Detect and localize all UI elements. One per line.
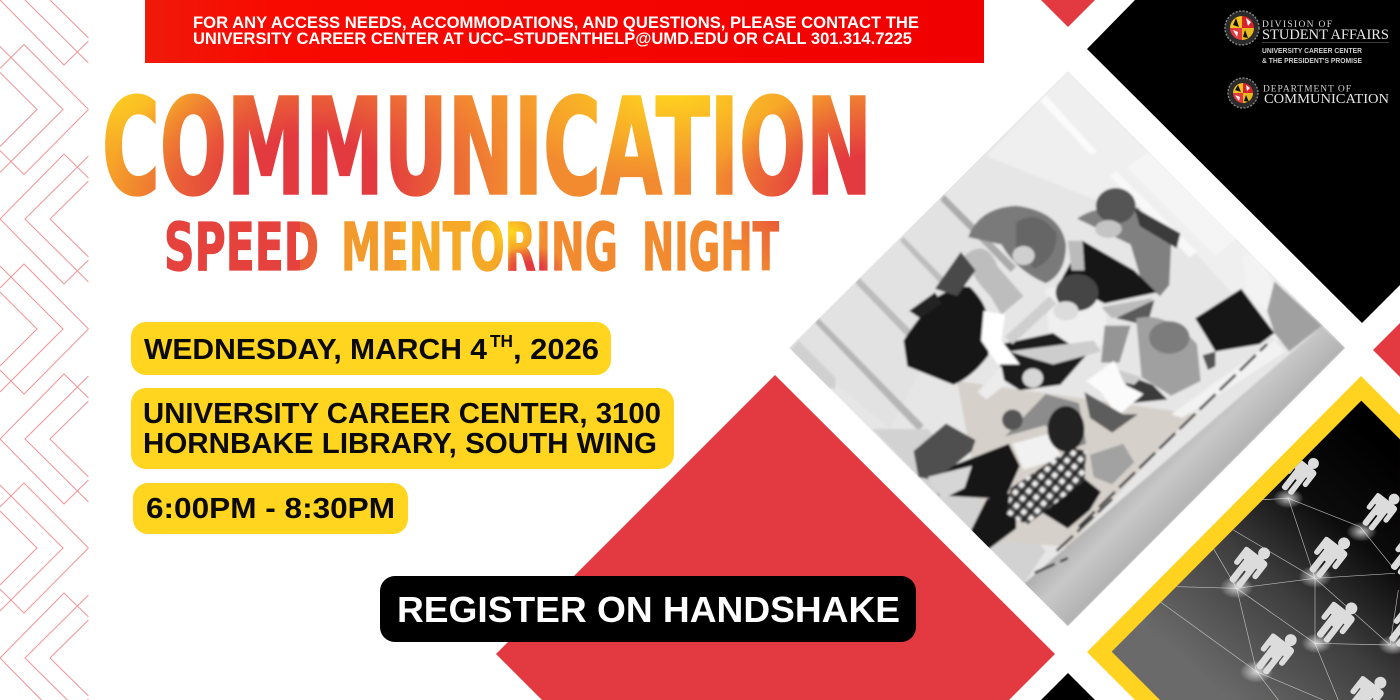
black diamond panel behind logos (1087, 0, 1400, 323)
network photo panel (1112, 400, 1400, 700)
logo: department of communication: DEPARTMENT OF (1263, 84, 1351, 94)
open book centre (981, 311, 1020, 364)
date pill (131, 322, 611, 375)
subtitle: SPEED (164, 209, 319, 286)
red contact banner (145, 0, 984, 63)
black backpack (904, 287, 988, 385)
network lines (1160, 498, 1398, 700)
logo: department of communication: COMMUNICATION (1264, 92, 1389, 107)
small black bottom diamond (1041, 673, 1095, 700)
logo: department of communication (1228, 78, 1389, 108)
person: right student (1136, 317, 1201, 396)
date pill: TH (490, 331, 513, 351)
diamond photo of students (790, 72, 1345, 626)
large red diamond (496, 375, 1055, 700)
left chevron line pattern (0, 0, 88, 700)
banner text (193, 14, 919, 48)
location pill (131, 388, 674, 469)
floor and steps (790, 72, 1345, 626)
yellow diamond frame (1087, 376, 1400, 700)
logo: division of student affairs: & THE PRESIDENT'S PROMISE (1262, 56, 1362, 65)
person: grey backpack (914, 423, 976, 481)
logo: division of student affairs: UNIVERSITY CAREER CENTER (1262, 46, 1362, 55)
location pill: UNIVERSITY CAREER CENTER, 3100 (143, 398, 661, 430)
logo: division of student affairs: STUDENT AFFAIRS (1262, 27, 1389, 43)
title: COMMUNICATION (102, 72, 872, 226)
date pill: WEDNESDAY, MARCH 4 (144, 334, 487, 366)
date pill: , 2026 (513, 334, 599, 366)
striped bag and bottom bag (1084, 392, 1138, 433)
person: centre student with white shirt (1048, 289, 1104, 344)
people icons (1223, 449, 1400, 700)
logo: division of student affairs (1225, 11, 1389, 65)
subtitle (164, 209, 779, 286)
icon: university seal small (1228, 78, 1258, 108)
logo: division of student affairs: DIVISION OF (1262, 20, 1332, 30)
time pill (133, 483, 408, 534)
person: bottom student in checked shirt (933, 444, 1020, 499)
banner text: UNIVERSITY CAREER CENTER AT UCC–STUDENTHELP@UMD.EDU OR CALL 301.314.7225 (193, 30, 912, 48)
icon: university seal (1225, 11, 1259, 45)
right red diamond (1373, 323, 1400, 377)
subtitle: NIGHT (642, 209, 779, 286)
subtitle: MENTORING (341, 209, 618, 286)
person: top-left student (964, 248, 1024, 315)
top red corner diamond (1041, 0, 1095, 27)
open book right (1086, 361, 1143, 416)
location pill: HORNBAKE LIBRARY, SOUTH WING (143, 428, 657, 460)
register button (380, 576, 916, 642)
person: student with glasses (1077, 207, 1171, 296)
dark edge strip (1035, 344, 1267, 573)
banner text: FOR ANY ACCESS NEEDS, ACCOMMODATIONS, AND QUESTIONS, PLEASE CONTACT THE (193, 14, 919, 32)
time pill: 6:00PM - 8:30PM (146, 493, 395, 525)
person: right standing figure (1195, 289, 1274, 352)
register button: REGISTER ON HANDSHAKE (397, 589, 900, 630)
node glows (1220, 488, 1400, 683)
